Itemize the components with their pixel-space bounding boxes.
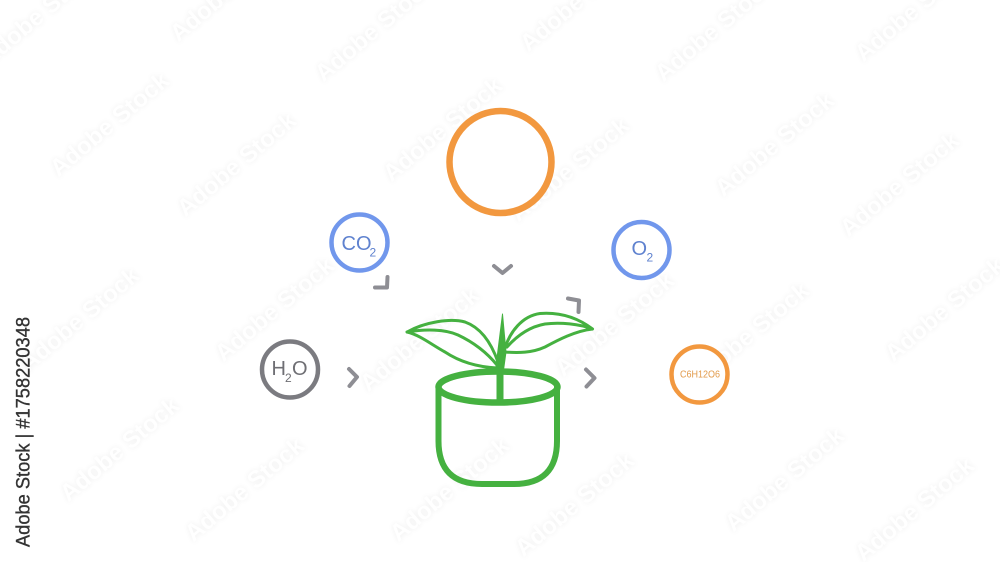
- text: Adobe Stock: [210, 252, 340, 367]
- CO2 node: CO: [342, 233, 372, 255]
- O2 node: O: [632, 238, 647, 260]
- left leaf: [407, 320, 498, 368]
- plant in pot: [407, 313, 592, 484]
- text: Adobe Stock: [172, 107, 302, 222]
- H2O node: O: [292, 358, 308, 380]
- text: Adobe Stock: [55, 392, 185, 507]
- right leaf: [505, 313, 592, 352]
- CO2 node: 2: [370, 246, 376, 260]
- C6H12O6 node: C6H12O6: [680, 370, 720, 380]
- text: Adobe Stock: [45, 67, 175, 182]
- stem: [496, 314, 506, 403]
- H2O node: H: [272, 358, 286, 380]
- pot rim: [438, 372, 558, 402]
- text: Adobe Stock: [710, 87, 840, 202]
- text: Adobe Stock: [15, 262, 145, 377]
- stock id label: Adobe Stock | #1758220348: [14, 317, 34, 547]
- text: Adobe Stock: [180, 432, 310, 547]
- CO2 node: [332, 214, 388, 270]
- pot body: [438, 386, 557, 484]
- arrow: plant to glucose: [586, 370, 594, 386]
- text: Adobe Stock: [378, 72, 508, 187]
- arrow: plant to O2: [568, 298, 579, 312]
- text: Adobe Stock: [685, 277, 815, 392]
- text: Adobe Stock: [510, 447, 640, 562]
- O2 node: 2: [646, 250, 654, 264]
- text: Adobe Stock: [505, 112, 635, 227]
- text: Adobe Stock: [355, 282, 485, 397]
- O2 node: [614, 222, 670, 278]
- arrow: CO2 to plant: [375, 277, 388, 288]
- text: Adobe Stock: [385, 432, 515, 547]
- H2O node: 2: [285, 371, 292, 385]
- text: Adobe Stock: [550, 267, 680, 382]
- arrow: sun to plant: [494, 266, 511, 273]
- text: Adobe Stock: [835, 127, 965, 242]
- C6H12O6 node: [672, 346, 728, 402]
- text: Adobe Stock: [720, 422, 850, 537]
- H2O node: [262, 342, 318, 398]
- arrow: H2O to plant: [349, 369, 357, 386]
- sun circle: [450, 111, 552, 213]
